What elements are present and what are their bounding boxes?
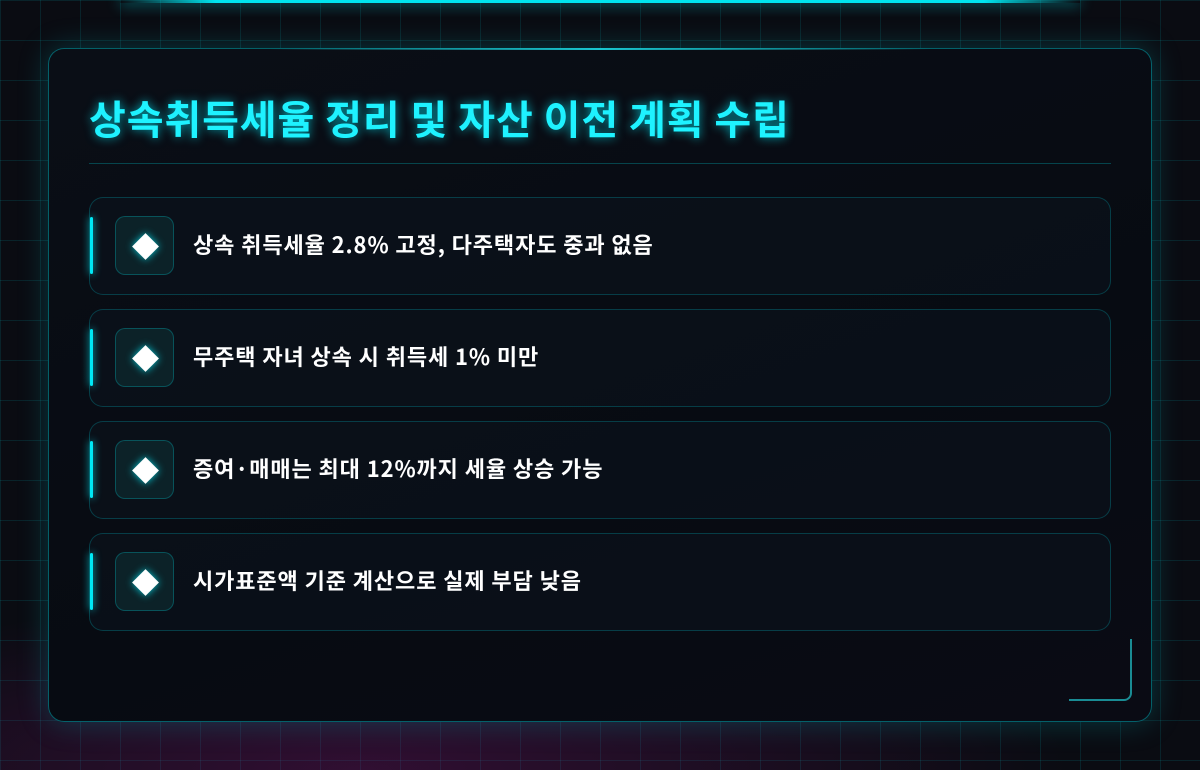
text: 시가표준액 기준 계산으로 실제 부담 낮음 xyxy=(193,564,582,596)
text: 증여·매매는 최대 12%까지 세율 상승 가능 xyxy=(193,452,603,484)
corner bracket xyxy=(1069,639,1132,701)
item 2 xyxy=(89,309,1111,407)
icon: diamond xyxy=(115,440,174,499)
item 1 xyxy=(89,197,1111,295)
title: 상속취득세율 정리 및 자산 이전 계획 수립 xyxy=(89,88,790,146)
icon: diamond xyxy=(115,552,174,611)
icon: diamond xyxy=(115,328,174,387)
item 4 xyxy=(89,533,1111,631)
text: 무주택 자녀 상속 시 취득세 1% 미만 xyxy=(193,340,539,372)
icon: diamond xyxy=(115,216,174,275)
text: 상속 취득세율 2.8% 고정, 다주택자도 중과 없음 xyxy=(193,228,654,260)
item 3 xyxy=(89,421,1111,519)
